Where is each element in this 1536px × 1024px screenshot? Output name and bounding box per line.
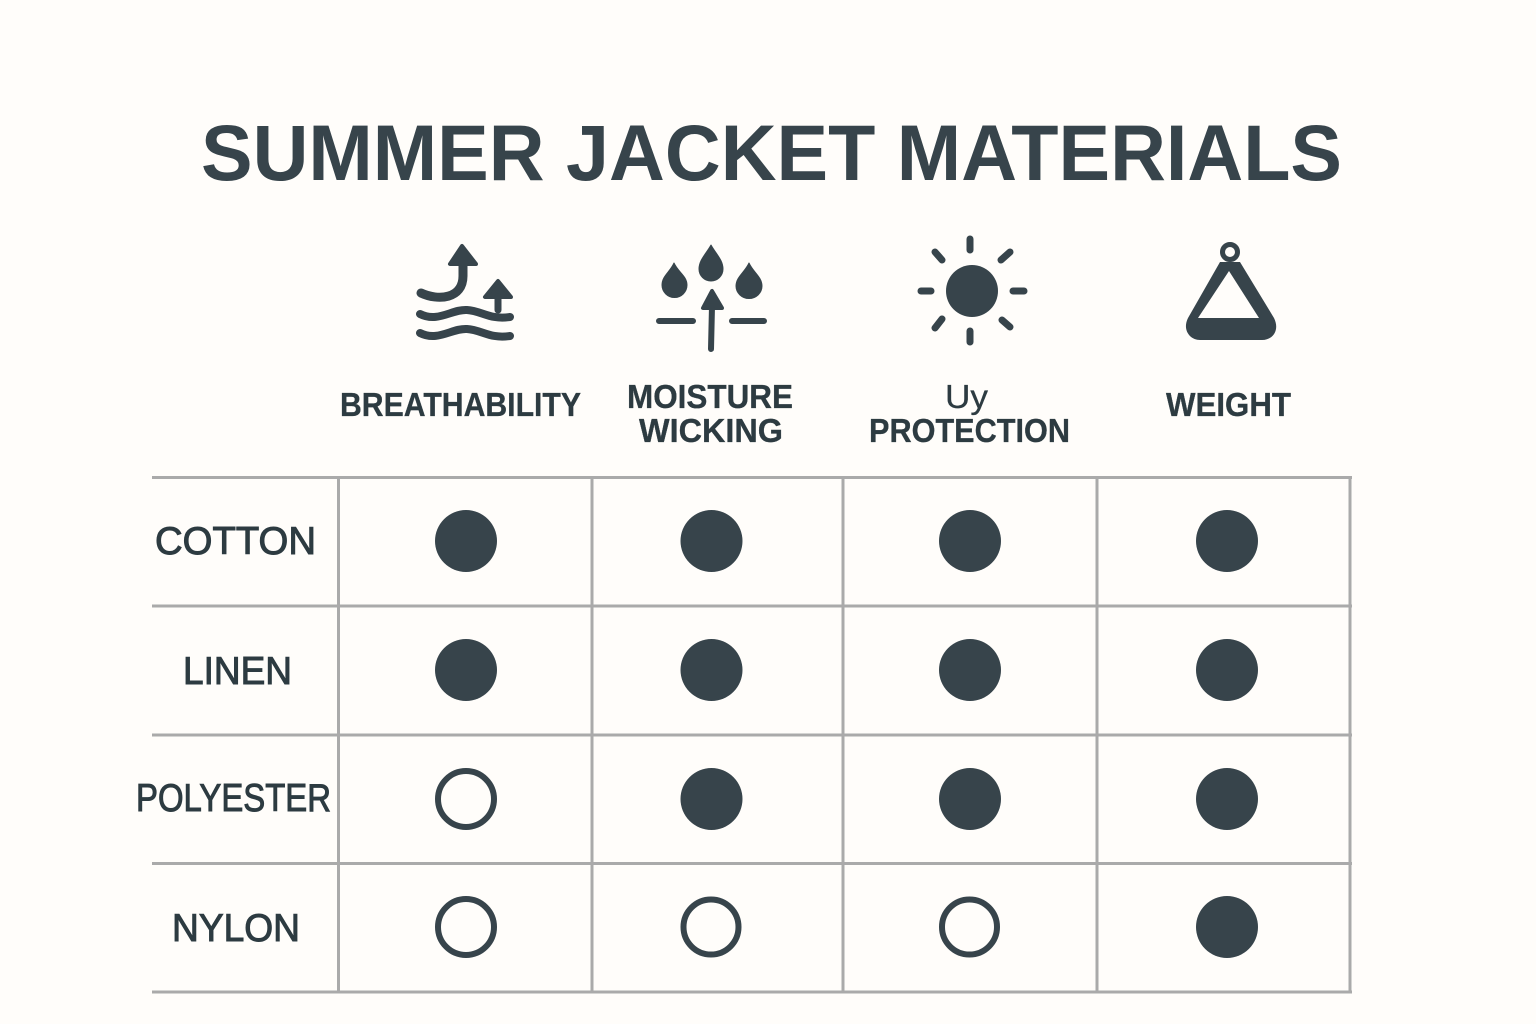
icon: sun [921,239,1024,342]
row markers: nylon [438,896,1258,958]
comparison table grid [152,476,1352,993]
icon: moisture wicking [659,245,764,349]
row label: linen: LINEN [183,650,292,693]
icon: weight [1186,244,1276,340]
row markers: polyester [438,768,1258,830]
row label: polyester: POLYESTER [136,777,331,820]
column heading: moisture wicking [627,378,793,449]
row label: cotton: COTTON [155,520,316,563]
icon: breathability [420,246,511,337]
column heading: moisture wicking: WICKING [639,412,783,449]
column heading: UV protection [869,378,1070,449]
column heading: breathability: BREATHABILITY [340,386,581,423]
column heading: UV protection: Uy [945,378,989,415]
row markers: cotton [435,510,1258,572]
row markers: linen [435,639,1258,701]
column heading: weight: WEIGHT [1166,386,1291,423]
column heading: UV protection: PROTECTION [869,412,1070,449]
column heading: moisture wicking: MOISTURE [627,378,793,415]
title: SUMMER JACKET MATERIALS [201,108,1342,197]
row label: nylon: NYLON [172,907,300,950]
